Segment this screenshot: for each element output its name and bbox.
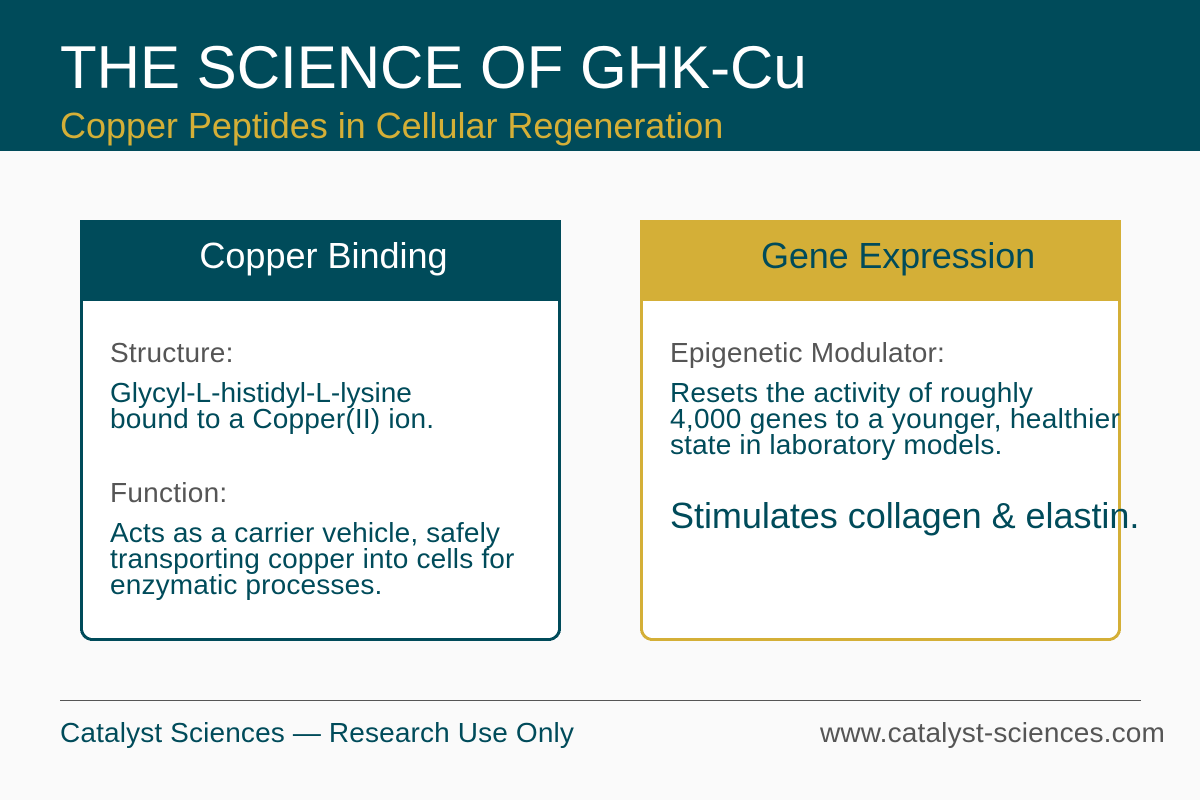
panel header: gene expression: Gene Expression — [761, 235, 1035, 276]
footer: website: www.catalyst-sciences.com — [819, 717, 1165, 748]
text block: structure — [110, 337, 434, 434]
panel: gene expression — [640, 220, 1139, 640]
text block: epigenetic modulator: Epigenetic Modulator: — [670, 337, 945, 368]
subtitle: Copper Peptides in Cellular Regeneration — [60, 105, 723, 146]
panel header: gene expression — [640, 220, 1121, 301]
text block: epigenetic modulator: state in laboratory models. — [670, 429, 1002, 460]
panel header: copper binding — [80, 220, 561, 301]
panel: copper binding — [80, 220, 561, 640]
text block: epigenetic modulator: Resets the activity of roughly — [670, 377, 1033, 408]
text block: function: Acts as a carrier vehicle, safely — [110, 517, 500, 548]
title: THE SCIENCE OF GHK-Cu — [60, 34, 807, 101]
text block: epigenetic modulator — [670, 337, 1120, 460]
panel header: copper binding: Copper Binding — [199, 235, 448, 276]
text block: structure: Structure: — [110, 337, 234, 368]
text block: function — [110, 477, 515, 600]
text block: function: Function: — [110, 477, 227, 508]
text block: function: enzymatic processes. — [110, 569, 382, 600]
header banner — [0, 0, 1200, 151]
text block: epigenetic modulator: 4,000 genes to a younger, healthier — [670, 403, 1120, 434]
footer: organization: Catalyst Sciences — Research Use Only — [60, 717, 574, 748]
text block: function: transporting copper into cells for — [110, 543, 515, 574]
callout: collagen and elastin: Stimulates collagen & elastin. — [670, 495, 1139, 536]
text block: structure: bound to a Copper(II) ion. — [110, 403, 434, 434]
text block: structure: Glycyl-L-histidyl-L-lysine — [110, 377, 412, 408]
